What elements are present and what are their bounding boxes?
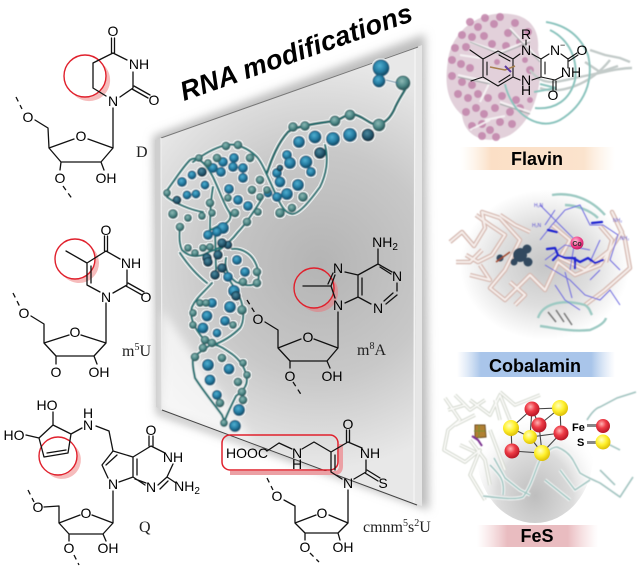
panel: Flavin protein structure: N (521, 72, 531, 88)
molecule: Q (queuosine): O (33, 499, 44, 515)
bonds: cmnm5s2U (267, 430, 380, 540)
label: cmnm5s2U: s (408, 519, 414, 536)
label: m8A: A (374, 342, 386, 359)
molecule: Q (queuosine): NH (163, 449, 183, 465)
molecule: m8A: O (253, 311, 264, 327)
molecule: Q (queuosine): O (81, 505, 92, 521)
molecule: m5U: O (141, 289, 152, 305)
molecule: cmnm5s2U: O (343, 416, 354, 432)
panel: Flavin protein structure: H (521, 82, 531, 98)
molecule: cmnm5s2U: OH (332, 539, 354, 555)
molecule: Q (queuosine): O (64, 540, 75, 556)
molecule: cmnm5s2U: O (272, 488, 283, 504)
molecule: Q (queuosine) (4, 397, 200, 565)
molecule: m8A: O (303, 329, 314, 345)
molecule: m5U: N (101, 289, 111, 305)
panel: Flavin protein structure: R (521, 26, 531, 42)
molecule: Q (queuosine): NH (174, 478, 194, 494)
molecule: D (dihydrouridine): O (149, 92, 160, 108)
molecule: m8A: NH (372, 234, 392, 250)
label: Flavin: Flavin (511, 149, 563, 169)
legend: Fe and S atoms (572, 419, 610, 450)
highlight circle: Q (39, 437, 81, 479)
bonds: Q (26, 412, 176, 541)
panel: Flavin protein structure: O (577, 42, 588, 58)
molecule: Q (queuosine): O (146, 422, 157, 438)
molecule: cmnm5s2U: O (317, 505, 328, 521)
molecule: m8A: N (373, 300, 383, 316)
molecule: cmnm5s2U: S (378, 475, 388, 491)
molecule: m8A: 2 (392, 242, 398, 253)
molecule: m8A (247, 234, 402, 396)
label: m5U: 5 (134, 342, 139, 353)
molecule: D (dihydrouridine): OH (96, 170, 116, 186)
bonds: m5U (31, 236, 144, 364)
label: D: D (136, 144, 148, 161)
label: cmnm5s2U: U (419, 519, 431, 536)
molecule: Q (queuosine): HO (4, 427, 25, 443)
panel: Flavin protein structure (446, 13, 632, 141)
molecule: D (dihydrouridine): NH (129, 56, 149, 72)
label: m5U: m (122, 343, 134, 360)
molecule: m8A: N (333, 297, 343, 313)
label: Flavin (460, 147, 615, 170)
molecule: m8A: O (285, 368, 296, 384)
label: m8A: m (357, 342, 369, 359)
molecule: cmnm5s2U: H (292, 456, 302, 472)
molecule: Q (queuosine): HO (36, 397, 58, 413)
highlight box: cmnm5s2U (222, 435, 341, 473)
molecule: D (dihydrouridine): O (76, 128, 87, 144)
molecule: Q (queuosine): N (108, 476, 118, 492)
legend: Fe and S atoms: S (577, 437, 584, 449)
molecule: cmnm5s2U: N (292, 445, 302, 461)
legend: Fe and S atoms: Fe (572, 422, 585, 434)
highlight circle: m8A (294, 268, 338, 312)
panel: Flavin protein structure: NH (561, 64, 581, 80)
molecule: m5U: O (70, 324, 81, 340)
label: cmnm5s2U: 5 (403, 518, 408, 529)
molecule: D (dihydrouridine) (16, 23, 160, 200)
molecule: cmnm5s2U: NH (360, 445, 380, 461)
molecule: D (dihydrouridine): O (55, 170, 66, 186)
RNA 3D structure (164, 60, 410, 432)
panel: FeS protein structure (444, 387, 636, 523)
label: Cobalamin (457, 352, 615, 377)
panel: Cobalamin protein structure: NH₂ (613, 218, 622, 224)
molecule: m5U: OH (88, 364, 110, 380)
molecule: D (dihydrouridine): O (108, 23, 119, 39)
panel: Cobalamin protein structure (450, 190, 630, 340)
label: m8A: 8 (369, 341, 374, 352)
molecule: m5U: O (19, 305, 30, 321)
molecule: m5U: O (101, 222, 112, 238)
molecule: Q (queuosine): H (83, 405, 93, 421)
molecule: m5U (13, 222, 152, 380)
panel: Flavin protein structure: N (521, 42, 531, 58)
bonds: D (35, 38, 150, 170)
molecule: D (dihydrouridine): N (108, 93, 118, 109)
label: FeS: FeS (520, 526, 554, 546)
highlight circle: m5U (55, 239, 99, 283)
label: FeS (477, 525, 598, 547)
label: Q: Q (139, 519, 151, 536)
molecule: Q (queuosine): 2 (194, 486, 200, 497)
label: m5U: U (139, 343, 151, 360)
panel: Flavin protein structure: O (548, 87, 559, 103)
molecule: m8A: N (333, 260, 343, 276)
label: cmnm5s2U: 2 (414, 518, 419, 529)
title: RNA modifications (176, 0, 416, 107)
panel: Cobalamin protein structure: NH₂ (620, 236, 629, 242)
molecule: m8A: OH (322, 368, 342, 384)
panel: Cobalamin protein structure: Co (572, 241, 582, 248)
molecule: m8A: N (392, 268, 402, 284)
label: Cobalamin: Cobalamin (489, 356, 581, 376)
molecule: m5U: O (51, 364, 62, 380)
molecule: cmnm5s2U (222, 416, 388, 562)
panel: Flavin protein structure: N (550, 42, 560, 58)
molecule: cmnm5s2U: O (300, 539, 311, 555)
panel: Cobalamin protein structure: H₂N (532, 223, 542, 229)
molecule: Q (queuosine): OH (98, 540, 118, 556)
molecule: m5U: NH (121, 255, 141, 271)
highlight circle: D (64, 55, 110, 101)
molecule: D (dihydrouridine): O (23, 109, 34, 125)
label: cmnm5s2U: cmnm (363, 519, 403, 536)
panel: Flavin protein structure: − (560, 40, 565, 50)
molecule: cmnm5s2U: HOOC (226, 445, 268, 461)
panel: Cobalamin protein structure: H₂N (534, 203, 544, 209)
molecule: Q (queuosine): N (83, 417, 93, 433)
molecule: Q (queuosine): N (146, 479, 156, 495)
bonds: m8A (265, 249, 397, 368)
molecule: cmnm5s2U: N (343, 475, 353, 491)
panel: tilted RNA plane (153, 34, 429, 510)
